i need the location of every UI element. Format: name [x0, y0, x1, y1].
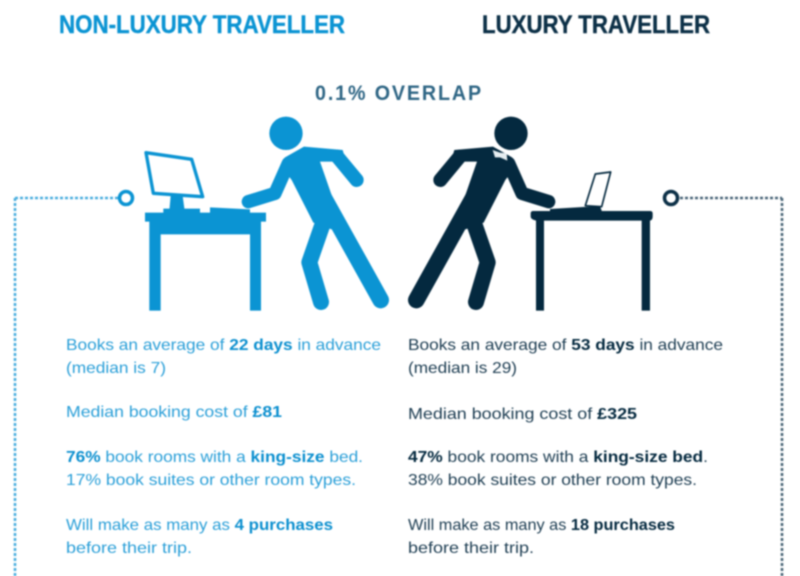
heading: luxury traveller: LUXURY TRAVELLER [482, 11, 710, 39]
text block: non-luxury stats [66, 337, 381, 557]
desk with monitor [145, 153, 266, 311]
text block: non-luxury stats: 76% book rooms with a king-size bed. [66, 449, 363, 466]
text block: luxury stats [408, 337, 723, 557]
text block: non-luxury stats: Median booking cost of £81 [66, 404, 282, 421]
heading: non-luxury traveller: NON-LUXURY TRAVELLER [59, 11, 345, 39]
connector: right dotted frame [664, 192, 782, 576]
text block: luxury stats: 38% book suites or other room types. [408, 472, 697, 489]
text block: luxury stats: Will make as many as 18 purchases [408, 517, 675, 534]
text block: luxury stats: Books an average of 53 days in advance [408, 337, 723, 354]
connector: left dotted frame [15, 192, 132, 576]
text block: non-luxury stats: (median is 7) [66, 360, 166, 377]
text block: non-luxury stats: Books an average of 22 days in advance [66, 337, 381, 354]
icon: luxury person at laptop [416, 117, 653, 311]
bow tie [493, 150, 507, 161]
desk with laptop [531, 172, 653, 311]
person figure [248, 117, 381, 302]
text block: luxury stats: Median booking cost of £325 [408, 406, 637, 423]
person figure [416, 117, 549, 302]
icon: non-luxury person at desktop computer [145, 117, 381, 311]
text block: non-luxury stats: 17% book suites or other room types. [66, 472, 356, 489]
text block: luxury stats: (median is 29) [408, 360, 517, 377]
text block: non-luxury stats: before their trip. [66, 540, 192, 557]
text block: luxury stats: 47% book rooms with a king-size bed . [408, 449, 708, 466]
heading: 0.1% overlap: 0.1% OVERLAP [315, 82, 483, 105]
text block: luxury stats: before their trip. [408, 540, 534, 557]
text block: non-luxury stats: Will make as many as 4 purchases [66, 517, 333, 534]
